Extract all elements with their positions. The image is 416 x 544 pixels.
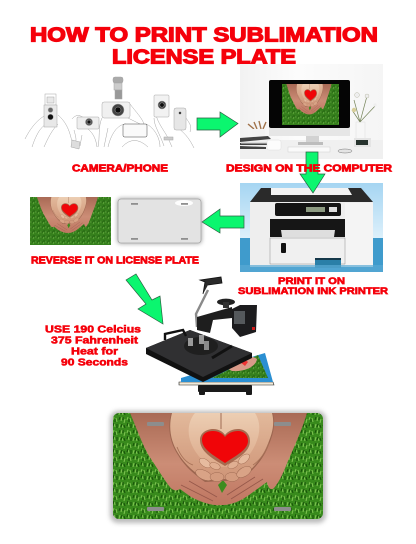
label: reverse it on license plate: REVERSE IT ON LICENSE PLATE <box>31 256 199 266</box>
finished license plate <box>110 411 326 523</box>
title: LICENSE PLATE <box>112 46 296 68</box>
title <box>30 24 378 68</box>
arrow: camera to computer <box>197 112 238 137</box>
arrow: computer to printer <box>300 152 325 193</box>
heat settings text: USE 190 Celcius <box>45 324 142 336</box>
desk objects <box>240 93 377 153</box>
arrow: plate to heat press <box>126 274 163 324</box>
title: HOW TO PRINT SUBLIMATION <box>30 24 378 46</box>
reversed image print <box>30 197 111 245</box>
label: print it on sublimation ink printer: SUBLIMATION INK PRINTER <box>238 286 388 297</box>
label: print it on sublimation ink printer <box>238 276 388 297</box>
printer photo <box>240 183 383 272</box>
arrow: printer to plate <box>202 209 244 233</box>
label: camera/phone: CAMERA/PHONE <box>72 164 169 174</box>
arm and lever <box>196 277 235 333</box>
heat settings text <box>45 324 142 368</box>
monitor <box>269 80 350 145</box>
control box <box>232 305 257 337</box>
printer body <box>240 188 383 272</box>
heat settings text: 375 Fahrenheit <box>51 336 139 346</box>
label: print it on sublimation ink printer: PRINT IT ON <box>278 276 345 287</box>
mounting slots <box>147 422 291 511</box>
heat settings text: Heat for <box>71 346 118 358</box>
computer photo <box>240 64 383 159</box>
illustration: hands with cameras and phones <box>25 77 194 149</box>
label: design on the computer: DESIGN ON THE COMPUTER <box>226 164 392 174</box>
base and lower plate <box>179 353 274 395</box>
upper platen <box>146 330 252 382</box>
grass and hands photo <box>113 413 323 519</box>
heat press machine <box>146 277 274 395</box>
heat settings text: 90 Seconds <box>61 358 129 368</box>
wallpaper <box>282 84 339 125</box>
blank license plate <box>117 198 202 244</box>
